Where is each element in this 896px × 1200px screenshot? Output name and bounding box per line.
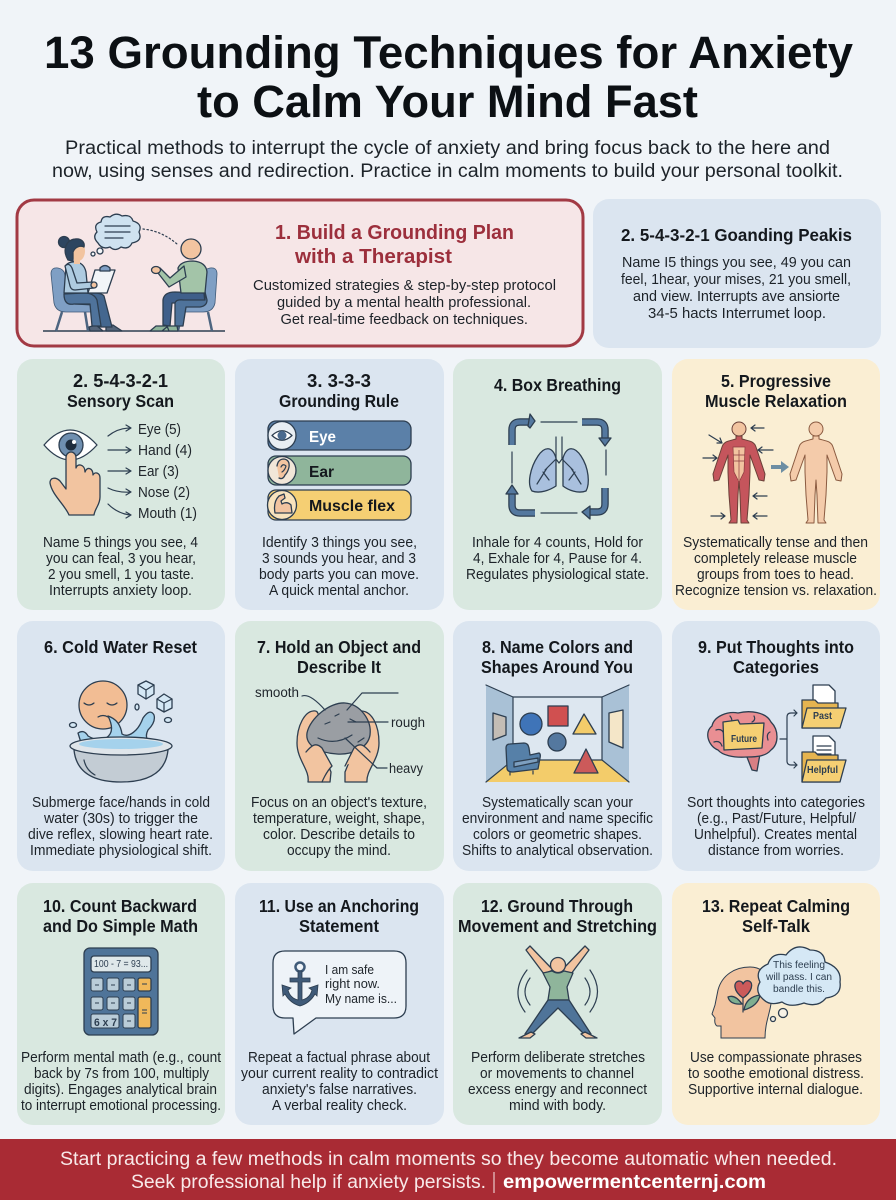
- heading: 9. Put Thoughts into: [698, 637, 854, 657]
- heading: 8. Name Colors and: [482, 637, 633, 657]
- heading: [481, 637, 633, 677]
- heading: [257, 637, 421, 677]
- subtitle: [52, 138, 843, 182]
- panel: 2 sensory scan: [17, 359, 225, 610]
- text block: water (30s) to trigger the: [43, 811, 198, 827]
- heading: [67, 371, 174, 411]
- panel: 4 box breathing: [453, 359, 662, 610]
- sense labels: [138, 421, 197, 522]
- sense labels: Eye (5): [138, 421, 181, 438]
- icon: lungs in breathing box: [506, 414, 611, 519]
- text block: Supportive internal dialogue.: [688, 1082, 863, 1098]
- heading: with a Therapist: [294, 246, 452, 268]
- icon: calculator: 6 x 7: [94, 1017, 117, 1029]
- heading: Describe It: [297, 657, 381, 677]
- icon: room with shapes: [486, 685, 629, 782]
- text block: [251, 795, 427, 859]
- text block: 34-5 hacts Interrumet loop.: [648, 306, 826, 322]
- heading: 2. 5-4-3-2-1: [73, 371, 168, 391]
- heading: and Do Simple Math: [43, 916, 198, 936]
- text block: colors or geometric shapes.: [473, 827, 642, 843]
- heading: Sensory Scan: [67, 391, 174, 411]
- text block: 2 you smell, 1 you taste.: [48, 567, 194, 583]
- icon: stretching figure: [518, 946, 598, 1038]
- panel: 3 3-3-3 grounding rule: [235, 359, 444, 610]
- icon: head with heart and thought cloud: bandle this.: [773, 983, 825, 995]
- sense labels: Nose (2): [138, 484, 190, 501]
- text block: feel, 1hear, your mises, 21 you smell,: [621, 272, 851, 288]
- footer banner: empowermentcenternj.com: [503, 1172, 766, 1193]
- text block: A quick mental anchor.: [269, 583, 409, 599]
- ear pill: [268, 456, 411, 485]
- text block: [468, 1050, 647, 1114]
- heading: 12. Ground Through: [481, 896, 633, 916]
- text block: and view. Interrupts ave ansiorte: [633, 289, 840, 305]
- text block: (e.g., Past/Future, Helpful/: [697, 811, 857, 827]
- title: to Calm Your Mind Fast: [197, 76, 698, 127]
- text block: anxiety's false narratives.: [262, 1082, 417, 1098]
- heading: Movement and Stretching: [458, 916, 657, 936]
- text block: mind with body.: [509, 1098, 606, 1114]
- panel: 13 calming self-talk: [672, 883, 880, 1125]
- icon: speech bubble with anchor: My name is...: [325, 991, 397, 1006]
- heading: 11. Use an Anchoring: [259, 896, 419, 916]
- sense labels: Hand (4): [138, 442, 192, 459]
- text block: color. Describe details to: [263, 827, 415, 843]
- icon: brain sorting into folders: Future: [731, 734, 757, 745]
- text block: Interrupts anxiety loop.: [49, 583, 192, 599]
- text block: Submerge face/hands in cold: [32, 795, 210, 811]
- icon: head with heart and thought cloud: will pass. I can: [765, 971, 832, 983]
- text block: to interrupt emotional processing.: [21, 1098, 221, 1114]
- panel: 10 count backward: [17, 883, 225, 1125]
- text block: body parts you can move.: [259, 567, 419, 583]
- text block: to soothe emotional distress.: [688, 1066, 864, 1082]
- text block: Focus on an object's texture,: [251, 795, 427, 811]
- sense labels: Mouth (1): [138, 505, 197, 522]
- heading: 10. Count Backward: [43, 896, 197, 916]
- icon: speech bubble with anchor: I am safe: [325, 962, 374, 977]
- text block: Name I5 things you see, 49 you can: [622, 255, 851, 271]
- text block: environment and name specific: [462, 811, 653, 827]
- heading: [275, 222, 514, 268]
- arrows: [108, 425, 131, 518]
- text block: Recognize tension vs. relaxation.: [675, 583, 877, 599]
- heading: Shapes Around You: [481, 657, 633, 677]
- text block: digits). Engages analytical brain: [24, 1082, 217, 1098]
- heading: Grounding Rule: [279, 391, 399, 411]
- text block: [28, 795, 213, 859]
- text block: Perform mental math (e.g., count: [21, 1050, 221, 1066]
- text block: dive reflex, slowing heart rate.: [28, 827, 213, 843]
- heading: [705, 371, 847, 411]
- panel: 9 put thoughts into categories: [672, 621, 880, 871]
- heading: 7. Hold an Object and: [257, 637, 421, 657]
- subtitle: now, using senses and redirection. Practice in calm moments to build your personal toolkit.: [52, 161, 843, 182]
- icon: calculator: 100 - 7 = 93...: [94, 959, 148, 970]
- icon: brain sorting into folders: Past: [813, 711, 833, 722]
- heading: [43, 896, 198, 936]
- text block: 4, Exhale for 4, Pause for 4.: [473, 551, 642, 567]
- text block: Customized strategies & step-by-step protocol: [253, 278, 556, 294]
- text block: guided by a mental health professional.: [277, 295, 531, 311]
- text block: Repeat a factual phrase about: [248, 1050, 430, 1066]
- text block: [687, 795, 865, 859]
- icon: hands holding a stone: rough: [391, 715, 425, 730]
- text block: occupy the mind.: [287, 843, 391, 859]
- text block: [43, 535, 198, 599]
- heading: 2. 5-4-3-2-1 Goanding Peakis: [621, 225, 852, 245]
- text block: you can feal, 3 you hear,: [46, 551, 196, 567]
- heading: [458, 896, 657, 936]
- text block: or movements to channel: [480, 1066, 634, 1082]
- title: 13 Grounding Techniques for Anxiety: [44, 27, 853, 78]
- heading: [259, 896, 419, 936]
- text block: excess energy and reconnect: [468, 1082, 647, 1098]
- heading: Muscle Relaxation: [705, 391, 847, 411]
- text block: Unhelpful). Creates mental: [694, 827, 857, 843]
- icon: eye and pointing hand: [44, 430, 100, 515]
- title: [44, 27, 853, 127]
- text block: Immediate physiological shift.: [30, 843, 212, 859]
- text block: [241, 1050, 438, 1114]
- heading: [279, 371, 399, 411]
- sense labels: Ear (3): [138, 463, 179, 480]
- muscle flex pill: [268, 490, 411, 520]
- panel: 5 progressive muscle relaxation: [672, 359, 880, 610]
- panel: 8 name colors and shapes: [453, 621, 662, 871]
- text block: [462, 795, 653, 859]
- heading: Categories: [733, 657, 819, 677]
- footer banner: Start practicing a few methods in calm moments so they become automatic when needed.: [60, 1149, 837, 1170]
- text block: distance from worries.: [708, 843, 844, 859]
- muscle flex pill: Muscle flex: [309, 498, 395, 515]
- subtitle: Practical methods to interrupt the cycle of anxiety and bring focus back to the here and: [65, 138, 830, 159]
- text block: Inhale for 4 counts, Hold for: [472, 535, 643, 551]
- text block: [253, 278, 556, 328]
- heading: 5. Progressive: [721, 371, 831, 391]
- panel: 12 movement and stretching: [453, 883, 662, 1125]
- eye pill: Eye: [309, 429, 336, 446]
- icon: calculator: [84, 948, 158, 1035]
- heading: 13. Repeat Calming: [702, 896, 850, 916]
- icon: tense and relaxed bodies: [703, 422, 842, 523]
- text block: Use compassionate phrases: [690, 1050, 862, 1066]
- panel: 7 hold an object: [235, 621, 444, 871]
- illustration: therapist and client: [43, 214, 225, 331]
- text block: Get real-time feedback on techniques.: [280, 312, 528, 328]
- text block: [466, 535, 649, 583]
- icon: head with heart and thought cloud: This feeling: [773, 959, 825, 971]
- footer banner: [0, 1139, 896, 1200]
- icon: hands holding a stone: [255, 685, 425, 782]
- heading: [702, 896, 850, 936]
- eye pill: [268, 421, 411, 450]
- text block: completely release muscle: [694, 551, 857, 567]
- text block: Shifts to analytical observation.: [462, 843, 653, 859]
- icon: hands holding a stone: heavy: [389, 761, 423, 776]
- heading: Self-Talk: [742, 916, 810, 936]
- heading: 6. Cold Water Reset: [44, 637, 197, 657]
- text block: A verbal reality check.: [272, 1098, 407, 1114]
- heading: 1. Build a Grounding Plan: [275, 222, 514, 244]
- text block: groups from toes to head.: [697, 567, 854, 583]
- panel: 6 cold water reset: [17, 621, 225, 871]
- icon: speech bubble with anchor: [273, 951, 406, 1034]
- text block: 3 sounds you hear, and 3: [262, 551, 416, 567]
- icon: brain sorting into folders: Helpful: [807, 765, 838, 776]
- text block: Systematically scan your: [482, 795, 633, 811]
- text block: your current reality to contradict: [241, 1066, 438, 1082]
- text block: [675, 535, 877, 599]
- text block: Systematically tense and then: [683, 535, 868, 551]
- panel: 1 build a grounding plan: [17, 200, 583, 346]
- text block: [259, 535, 419, 599]
- ear pill: Ear: [309, 464, 334, 481]
- heading: 3. 3-3-3: [307, 371, 371, 391]
- text block: [21, 1050, 221, 1114]
- text block: Regulates physiological state.: [466, 567, 649, 583]
- panel: 2 5-4-3-2-1 grounding peakis: [593, 199, 881, 348]
- text block: Sort thoughts into categories: [687, 795, 865, 811]
- text block: [621, 255, 851, 322]
- icon: head with heart and thought cloud: [712, 947, 840, 1038]
- heading: 4. Box Breathing: [494, 375, 621, 395]
- text block: temperature, weight, shape,: [253, 811, 425, 827]
- icon: hands holding a stone: smooth: [255, 685, 299, 700]
- footer banner: Seek professional help if anxiety persists.: [131, 1172, 486, 1193]
- text block: Name 5 things you see, 4: [43, 535, 198, 551]
- icon: speech bubble with anchor: right now.: [325, 976, 380, 991]
- text block: Identify 3 things you see,: [262, 535, 417, 551]
- text block: [688, 1050, 864, 1098]
- text block: back by 7s from 100, multiply: [34, 1066, 210, 1082]
- heading: [698, 637, 854, 677]
- icon: face splashing in bowl: [70, 681, 172, 782]
- icon: brain sorting into folders: [708, 685, 846, 782]
- heading: Statement: [299, 916, 379, 936]
- panel: 11 anchoring statement: [235, 883, 444, 1125]
- text block: Perform deliberate stretches: [471, 1050, 645, 1066]
